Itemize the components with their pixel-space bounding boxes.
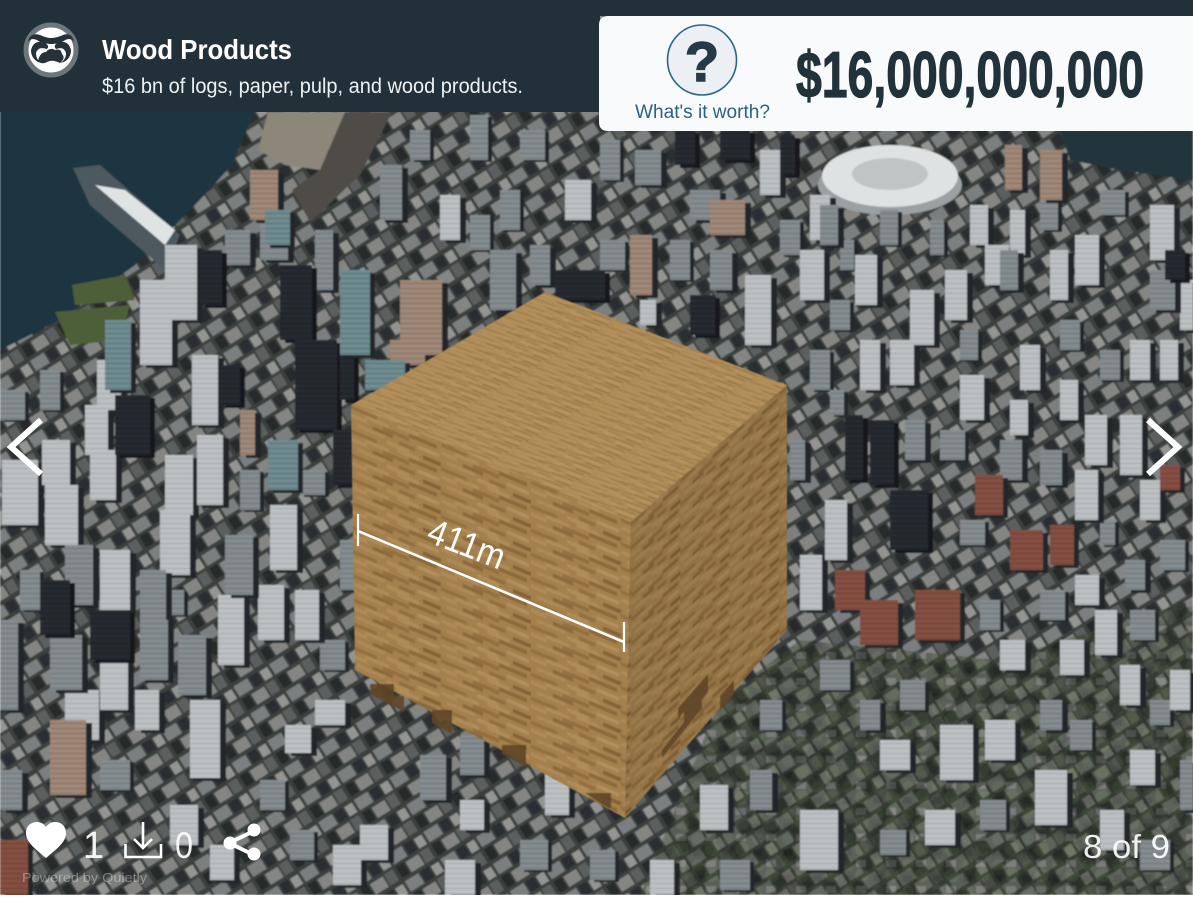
cube base shadow patches <box>370 674 734 808</box>
towers: mid <box>0 150 1193 810</box>
towers: beige and pink <box>50 145 1062 795</box>
bottom page strip <box>0 895 1193 903</box>
heading: Wood Products <box>102 34 292 65</box>
logo icon <box>26 25 76 75</box>
wood cube <box>351 292 787 818</box>
download count: 0 <box>175 825 193 866</box>
dimension line: 411m: 411m <box>422 510 512 577</box>
dimension line: 411m <box>358 510 624 652</box>
like count: 1 <box>83 825 104 867</box>
towers: green glass <box>105 210 405 490</box>
cube right face <box>625 385 787 818</box>
subheading: $16 bn of logs, paper, pulp, and wood products. <box>102 75 523 98</box>
question icon: ? <box>685 30 719 93</box>
rail yard <box>258 112 345 170</box>
icon: heart <box>26 822 66 858</box>
what's it worth label: What's it worth? <box>635 102 770 123</box>
towers: red brick <box>0 465 1180 895</box>
icon: share <box>224 824 260 860</box>
water: harbour <box>0 110 255 350</box>
question icon <box>668 25 736 95</box>
tree cover <box>640 600 1193 895</box>
arrow: previous <box>11 420 41 474</box>
cube top face <box>351 292 787 522</box>
powered by credit: Powered by Quietly <box>22 870 148 885</box>
header bar <box>0 0 1193 112</box>
wharf greens <box>55 275 135 345</box>
water: inlet <box>1060 130 1193 180</box>
arrow: next <box>1148 420 1178 474</box>
page counter: 8 of 9 <box>1083 828 1170 865</box>
stadium <box>818 145 962 215</box>
cube left face <box>351 405 631 818</box>
rail tracks <box>292 112 392 222</box>
towers: dark <box>40 130 1185 660</box>
icon: download <box>126 822 161 857</box>
cruise ship <box>73 165 180 270</box>
value panel <box>599 16 1193 131</box>
